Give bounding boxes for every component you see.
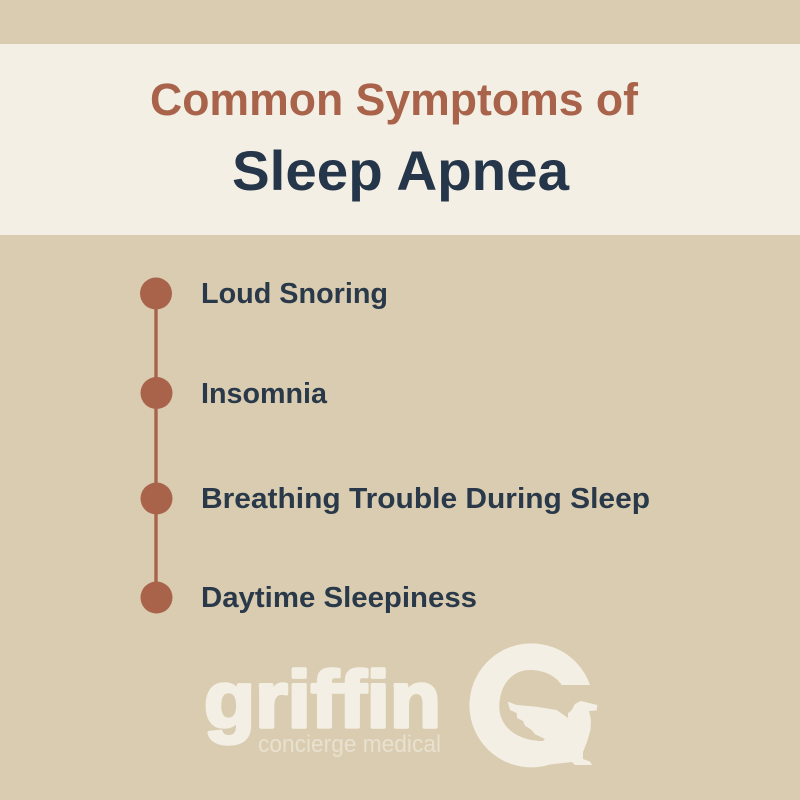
symptom: daytime sleepiness: Daytime Sleepiness <box>201 582 477 614</box>
logo tagline: concierge medical <box>258 731 441 758</box>
symptom: breathing trouble during sleep: Breathing Trouble During Sleep <box>201 483 650 515</box>
symptom: insomnia <box>140 377 328 410</box>
title: sleep apnea: Sleep Apnea <box>232 139 570 202</box>
logo: griffin concierge medical <box>204 643 597 767</box>
panel: symptoms timeline <box>140 278 650 614</box>
logo wordmark: griffin <box>204 655 441 744</box>
icon: griffin G emblem <box>469 643 597 767</box>
timeline connector <box>154 293 158 597</box>
panel: header <box>0 44 800 235</box>
symptom: insomnia: Insomnia <box>201 378 328 410</box>
symptom: loud snoring: Loud Snoring <box>201 278 388 310</box>
title: common symptoms of: Common Symptoms of <box>150 74 639 125</box>
